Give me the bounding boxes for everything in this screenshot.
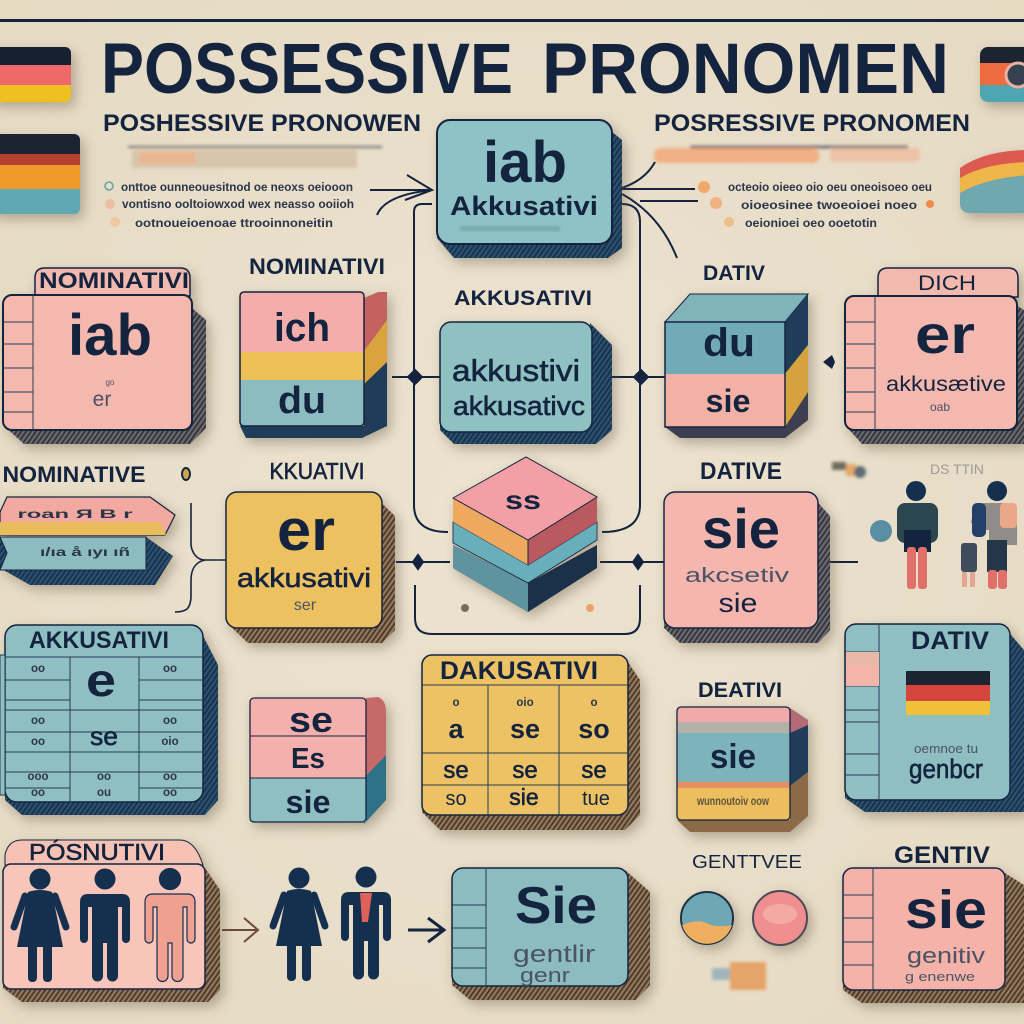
icon: curved flag right [960, 150, 1024, 213]
heading: Nominativi: NOMINATIVI [249, 254, 385, 279]
card: Akkusativi table: ooo [27, 771, 49, 783]
ribbon stack left: roan Я B r [18, 509, 134, 521]
stack: se Es sie [250, 697, 386, 824]
card: Akkusativi table [0, 625, 218, 815]
card: Akkusativi table: oo [163, 663, 177, 675]
card: er: er [277, 498, 335, 563]
arrow [222, 918, 258, 942]
card: sie center right: sie [702, 497, 780, 560]
subheading left: POSHESSIVE PRONOWEN [103, 110, 421, 137]
stack: sie: sie [710, 738, 756, 776]
card: Akkusativi table: oio [161, 736, 179, 748]
card: Sie Genitiv teal: Sie [515, 877, 597, 935]
heading: Dativ: DATIV [703, 262, 765, 285]
card: Dativ flag: oemnoe tu [914, 741, 978, 756]
card: Dich: akkusætive [886, 373, 1006, 396]
faint label: DS TTIN [930, 461, 984, 477]
card: Dakusativi table: DAKUSATIVI [440, 657, 598, 685]
card: Akkusativi table: se [90, 721, 118, 751]
card: Dich [845, 268, 1024, 444]
card: Nominativi [3, 268, 206, 444]
title: POSSESSIVE [101, 30, 513, 109]
text block left: onttoe ounneouesitnod oe neoxs oeiooon [121, 182, 353, 194]
stack: du sie: du [703, 321, 755, 365]
card: Sie Genitiv teal [452, 868, 650, 1000]
smudged bar left [128, 146, 382, 168]
card: Dakusativi table: so [578, 714, 610, 744]
card: er: akkusativi [237, 563, 371, 593]
icon: man [341, 866, 391, 980]
stack: se Es sie: se [289, 699, 333, 740]
card: Sie Genitiv teal: gentlir [513, 941, 595, 968]
card: Dakusativi table: se [443, 757, 469, 784]
icon: woman [273, 868, 325, 981]
card: iab Akkusativi: iab [483, 130, 567, 195]
card: Akkusativi table: oo [163, 715, 177, 727]
card: Nominativi: NOMINATIVI [39, 268, 189, 293]
isometric block: ss [505, 485, 541, 515]
small icon: dot [182, 468, 190, 480]
card: Dativ flag: DATIV [911, 627, 989, 655]
stack: ich du [240, 292, 387, 438]
card: Dich: oab [930, 400, 950, 414]
card: Akkusativi center: akkusativc [453, 391, 585, 421]
card: Akkusativi table: oo [31, 663, 45, 675]
card: Akkusativi center: akkustivi [452, 353, 580, 388]
heading: Gentiv: GENTIV [894, 842, 990, 869]
icon: circle right [753, 891, 807, 945]
card: Dativ flag: genbcr [909, 754, 983, 784]
heading: Akkusativi middle: KKUATIVI [270, 458, 364, 484]
card: er: ser [294, 597, 317, 614]
heading: Dative: DATIVE [700, 458, 782, 485]
heading: Deativi: DEATIVI [698, 679, 782, 702]
card: Akkusativi table: e [86, 654, 116, 706]
card: Sie Genitiv pink: g enenwe [905, 969, 975, 984]
arrow [408, 918, 444, 942]
smudged bar right [654, 146, 920, 163]
card: Akkusativi table: oo [163, 771, 177, 783]
card: Akkusativi table: ou [97, 787, 111, 799]
card: Dakusativi table: a [448, 714, 464, 744]
text block right: octeoio oieeo oio oeu oneoisoeo oeu [728, 182, 932, 194]
icon: circle left [681, 892, 733, 944]
stack: ich du: ich [274, 306, 330, 350]
icon: flag top right [980, 47, 1024, 102]
icon: German flag top left [0, 47, 71, 102]
card: Akkusativi table: oo [31, 736, 45, 748]
card: Akkusativi table: oo [31, 787, 45, 799]
small marks below block [461, 604, 594, 612]
ribbon stack left: ı/ıa å ıyı ıñ [40, 547, 130, 559]
card: Dakusativi table: o [452, 697, 460, 709]
isometric block [453, 457, 597, 612]
card: sie center right: sie [718, 588, 758, 618]
card: Dakusativi table: se [510, 714, 540, 744]
card: Dakusativi table: oio [516, 697, 534, 709]
card: Dich: DICH [918, 272, 976, 295]
text block left [105, 182, 354, 230]
ribbon stack left [0, 497, 175, 585]
text block right [698, 181, 934, 230]
bracket [175, 503, 226, 612]
card: Sie Genitiv pink [843, 868, 1024, 1003]
icon: people with luggage [870, 481, 1017, 589]
top rule [0, 19, 1024, 22]
heading: Nominative left: NOMINATIVE [2, 462, 146, 487]
stack: sie: wunnoutoiv oow [696, 796, 769, 808]
heading: Akkusativi center: AKKUSATIVI [454, 287, 592, 310]
card: Sie Genitiv teal: genr [520, 965, 570, 987]
card: er [226, 492, 395, 643]
stack: ich du: du [278, 380, 326, 422]
icon: diamond arrow [823, 355, 835, 369]
card: Akkusativi center [440, 322, 612, 444]
card: Dakusativi table: se [581, 757, 607, 784]
subheading right: POSRESSIVE PRONOMEN [654, 110, 970, 137]
stack: du sie: sie [706, 383, 750, 419]
card: Akkusativi table: oo [97, 771, 111, 783]
card: Nominativi: iab [68, 303, 152, 368]
stack: se Es sie: sie [286, 784, 330, 820]
card: Sie Genitiv pink: genitiv [907, 943, 985, 968]
text block right: oeionioei oeo ooetotin [745, 218, 877, 230]
text block left: vontisno ooltoiowxod wex neasso ooiioh [122, 199, 354, 211]
card: Sie Genitiv pink: sie [905, 880, 987, 940]
connectors [370, 162, 858, 634]
card: iab Akkusativi [437, 120, 622, 258]
card: Dich: er [915, 305, 975, 365]
card: Dakusativi table: tue [582, 788, 610, 810]
card: Dakusativi table: so [445, 788, 467, 810]
icon: smudge [832, 462, 866, 478]
title: PRONOMEN [542, 30, 949, 109]
stack: du sie [665, 294, 808, 438]
card: Dakusativi table: se [512, 757, 538, 784]
card: Nominativi: er [93, 388, 111, 411]
card: Nominativi: go [106, 378, 115, 387]
card: sie center right [664, 492, 830, 643]
card: Dakusativi table: sie [509, 784, 539, 810]
card: Akkusativi table: AKKUSATIVI [29, 627, 169, 654]
card: Akkusativi table: oo [31, 715, 45, 727]
smudge [712, 962, 766, 990]
card: Akkusativi table: oo [163, 787, 177, 799]
card: people [3, 839, 220, 1002]
text block left: ootnoueioenoae ttrooinnoneitin [135, 218, 333, 230]
heading: Gentive: GENTTVEE [692, 852, 802, 872]
card: Dativ flag [845, 624, 1024, 812]
card: Dakusativi table: o [590, 697, 598, 709]
text block right: oioeosinee twoeoioei noeo [741, 200, 917, 212]
icon: German flag left [0, 134, 80, 214]
card: iab Akkusativi: Akkusativi [450, 191, 598, 221]
card: people: PÓSNUTIVI [29, 839, 165, 865]
stack: sie [677, 707, 808, 832]
card: Dakusativi table [422, 655, 640, 830]
card: sie center right: akcsetiv [685, 565, 789, 587]
stack: se Es sie: Es [291, 743, 325, 775]
